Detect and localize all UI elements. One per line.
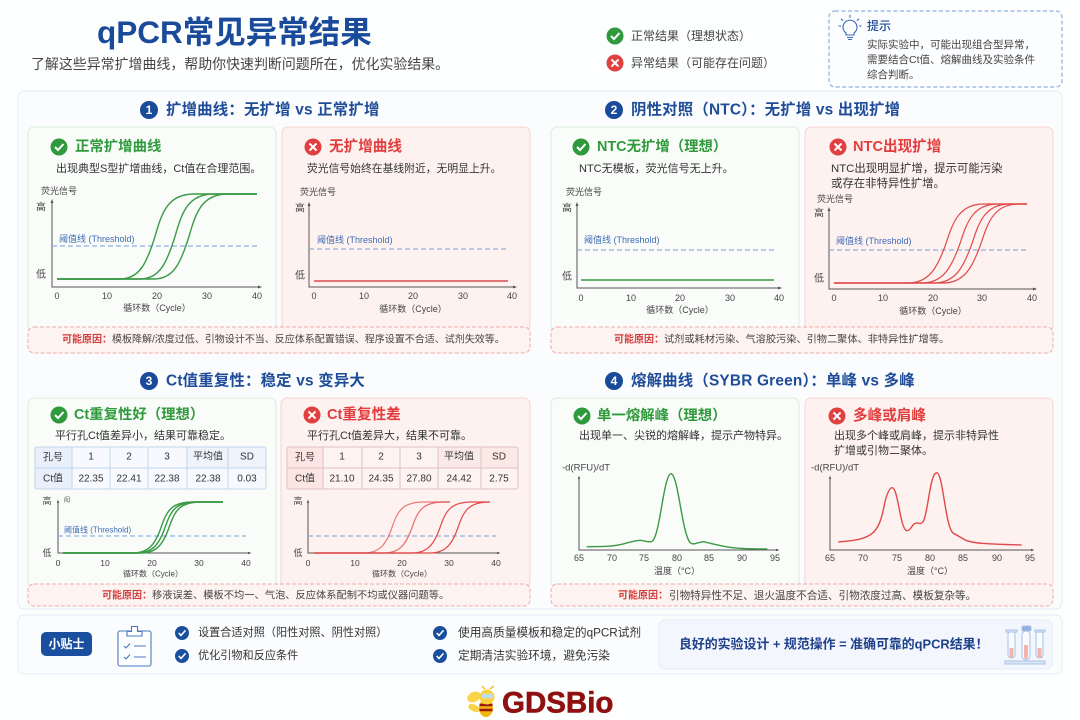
- data table: variable Ct values: SD: [492, 452, 506, 462]
- icon: light bulb: [838, 15, 862, 40]
- line chart: flat red line: 循环数（Cycle）: [379, 303, 447, 314]
- line chart: single melting peak: 80: [672, 553, 682, 563]
- data table: good Ct values: Ct值: [43, 472, 63, 484]
- line chart: spread red curves: 循环数（Cycle）: [372, 568, 432, 578]
- icon: check: [574, 408, 590, 424]
- line chart: normal S curves: 0: [54, 291, 60, 301]
- line chart: single melting peak: 85: [704, 553, 714, 563]
- callout: possible causes 4: [551, 584, 1053, 606]
- section 2 heading: 阴性对照（NTC）：无扩增 vs 出现扩增: [631, 100, 900, 118]
- tip text: 实际实验中，可能出现组合型异常，: [867, 38, 1035, 51]
- line chart: normal S curves: 高: [36, 200, 46, 214]
- line chart: red S curves: 阈值线 (Threshold): [836, 235, 912, 246]
- line chart: single melting peak: 65: [574, 553, 584, 563]
- callout: possible causes 2: 试剂或耗材污染、气溶胶污染、引物二聚体、非特异性扩增等。: [664, 332, 949, 346]
- icon: check: [50, 138, 68, 156]
- section 4 heading: 4: [611, 374, 618, 388]
- line chart: flat red line: [295, 186, 517, 314]
- icon: check: [50, 406, 68, 424]
- icon: cross: [304, 138, 322, 156]
- data table: good Ct values: 22.38: [195, 474, 221, 484]
- line chart: tight green curves: 高: [42, 495, 52, 506]
- card heading: 单一熔解峰（理想）: [597, 406, 727, 424]
- icon: cross: [304, 406, 320, 424]
- icon: cross: [830, 138, 846, 156]
- title: qPCR常见异常结果: [97, 14, 372, 50]
- callout: possible causes 3: 可能原因：: [102, 588, 152, 602]
- card heading: 多峰或肩峰: [853, 406, 926, 424]
- card heading: 无扩增曲线: [329, 137, 402, 155]
- tip text: 需要结合Ct值、熔解曲线及实验条件: [867, 53, 1035, 66]
- line chart: flat green line: 20: [675, 293, 685, 303]
- line chart: flat green line: 10: [626, 293, 636, 303]
- data table: good Ct values: SD: [240, 452, 254, 462]
- callout: possible causes 1: 模板降解/浓度过低、引物设计不当、反应体系配置错误、程序设置不合适、试剂失效等。: [112, 332, 505, 346]
- data table: variable Ct values: 24.42: [446, 474, 472, 484]
- line chart: red S curves: 40: [1027, 293, 1037, 303]
- line chart: tight green curves: 0: [56, 558, 61, 568]
- line chart: flat red line: 40: [507, 291, 517, 301]
- line chart: multiple melting peaks: 70: [858, 553, 868, 563]
- tip heading: 提示: [867, 18, 891, 33]
- line chart: single melting peak: 温度（°C）: [654, 565, 700, 576]
- subtitle: 了解这些异常扩增曲线，帮助你快速判断问题所在，优化实验结果。: [31, 56, 449, 72]
- line chart: multiple melting peaks: [811, 462, 1035, 576]
- card description: 出现单一、尖锐的熔解峰，提示产物特异。: [579, 428, 788, 442]
- data table: good Ct values: [35, 447, 266, 489]
- line chart: flat green line: 循环数（Cycle）: [646, 304, 714, 315]
- tip text: [867, 38, 1035, 81]
- icon: check: [572, 138, 590, 156]
- data table: good Ct values: 22.35: [78, 474, 104, 484]
- icon: test tubes: [1005, 626, 1045, 664]
- line chart: red S curves: 循环数（Cycle）: [899, 305, 967, 316]
- data table: variable Ct values: 27.80: [406, 474, 432, 484]
- panel: no amplification: [282, 127, 530, 332]
- line chart: red S curves: 0: [831, 293, 837, 303]
- data table: good Ct values: 2: [126, 452, 132, 462]
- line chart: tight green curves: 30: [194, 558, 204, 568]
- line chart: flat green line: [562, 186, 784, 315]
- tip: reagents: 使用高质量模板和稳定的qPCR试剂: [458, 626, 641, 640]
- panel: good repeatability: [28, 398, 276, 588]
- card description: 平行孔Ct值差异大，结果不可靠。: [307, 428, 472, 442]
- line chart: multiple melting peaks: 90: [992, 553, 1002, 563]
- card description: NTC无模板，荧光信号无上升。: [579, 161, 734, 175]
- icon: cross: [828, 408, 846, 424]
- card description: [831, 161, 1002, 190]
- callout: possible causes 2: 可能原因：: [614, 332, 664, 346]
- data table: good Ct values: 22.38: [154, 474, 180, 484]
- panel: single melt peak: [551, 398, 799, 588]
- line chart: red S curves: 30: [977, 293, 987, 303]
- line chart: single melting peak: 75: [639, 553, 649, 563]
- line chart: multiple melting peaks: 温度（°C）: [907, 565, 953, 576]
- line chart: normal S curves: 低: [36, 268, 46, 280]
- line chart: tight green curves: 循环数（Cycle）: [123, 568, 183, 578]
- line chart: spread red curves: 30: [444, 558, 454, 568]
- callout: possible causes 4: 可能原因：: [618, 588, 668, 602]
- data table: good Ct values: 平均值: [193, 450, 223, 462]
- line chart: red S curves: 低: [814, 272, 824, 284]
- card heading: 正常扩增曲线: [75, 137, 161, 155]
- callout: possible causes 1: [28, 327, 530, 353]
- callout: possible causes 2: [551, 327, 1053, 353]
- section 1 heading: 扩增曲线：无扩增 vs 正常扩增: [166, 100, 380, 118]
- data table: good Ct values: 3: [164, 452, 170, 462]
- tip: cleaning: 定期清洁实验环境，避免污染: [458, 648, 610, 662]
- line chart: tight green curves: 10: [100, 558, 110, 568]
- tip: controls: 设置合适对照（阳性对照、阴性对照）: [198, 625, 387, 639]
- line chart: flat green line: 30: [725, 293, 735, 303]
- line chart: normal S curves: 20: [152, 291, 162, 301]
- data table: variable Ct values: 24.35: [368, 474, 394, 484]
- line chart: normal S curves: 40: [252, 291, 262, 301]
- line chart: flat red line: 低: [295, 268, 305, 282]
- line chart: flat green line: 0: [578, 293, 584, 303]
- line chart: flat green line: 荧光信号: [566, 186, 602, 197]
- legend: normal result: [606, 28, 751, 44]
- line chart: single melting peak: 70: [607, 553, 617, 563]
- tips bar: [18, 615, 1062, 674]
- legend: normal result: 正常结果（理想状态）: [631, 28, 751, 43]
- line chart: red S curves: 20: [928, 293, 938, 303]
- line chart: normal S curves: 30: [202, 291, 212, 301]
- line chart: tight green curves: 闳: [64, 496, 70, 504]
- line chart: multiple melting peaks: 85: [958, 553, 968, 563]
- badge: tips: 小贴士: [48, 636, 85, 651]
- panel: NTC amplification: [805, 127, 1053, 332]
- card description: 出现多个峰或肩峰，提示非特异性: [834, 428, 999, 442]
- data table: good Ct values: 1: [88, 452, 94, 462]
- card heading: NTC出现扩增: [853, 137, 941, 155]
- line chart: flat red line: 0: [311, 291, 317, 301]
- data table: variable Ct values: 2.75: [489, 474, 509, 484]
- legend: abnormal result: 异常结果（可能存在问题）: [631, 56, 775, 70]
- line chart: spread red curves: [293, 495, 501, 578]
- data table: variable Ct values: [287, 447, 518, 489]
- line chart: tight green curves: 40: [241, 558, 251, 568]
- data table: variable Ct values: 2: [378, 452, 384, 462]
- line chart: spread red curves: 20: [397, 558, 407, 568]
- section 1: amplification curves: [28, 100, 530, 353]
- card description: 荧光信号始终在基线附近，无明显上升。: [307, 161, 501, 175]
- line chart: flat red line: 高: [295, 202, 305, 214]
- section 4: melting curves: [551, 370, 1053, 606]
- card description: 平行孔Ct值差异小，结果可靠稳定。: [55, 428, 231, 442]
- line chart: red S curves: 荧光信号: [817, 193, 853, 204]
- tip items: [175, 625, 641, 663]
- section 3 heading: 3: [146, 374, 153, 388]
- line chart: flat red line: 荧光信号: [300, 186, 336, 197]
- card heading: Ct重复性好（理想）: [74, 406, 204, 423]
- line chart: red S curves: [814, 193, 1037, 316]
- panel: multiple melt peaks: [805, 398, 1053, 588]
- line chart: spread red curves: 0: [306, 558, 311, 568]
- line chart: flat green line: 低: [562, 270, 572, 282]
- data table: good Ct values: 22.41: [116, 474, 142, 484]
- card description: NTC出现明显扩增，提示可能污染: [831, 161, 1002, 175]
- line chart: normal S curves: 荧光信号: [41, 185, 77, 196]
- line chart: flat red line: 20: [408, 291, 418, 301]
- tip: primers: [175, 648, 298, 663]
- icon: clipboard: [118, 626, 151, 666]
- line chart: flat red line: 阈值线 (Threshold): [317, 234, 393, 245]
- data table: variable Ct values: Ct值: [295, 472, 315, 484]
- line chart: tight green curves: 阈值线 (Threshold): [64, 524, 131, 534]
- card heading: Ct重复性差: [327, 405, 401, 423]
- card description: 或存在非特异性扩增。: [831, 176, 945, 190]
- line chart: single melting peak: [562, 462, 780, 576]
- icon: bee: [466, 686, 494, 717]
- section 2: negative control: [551, 100, 1053, 353]
- data table: variable Ct values: 21.10: [329, 474, 355, 484]
- panel: poor repeatability: [281, 398, 530, 588]
- line chart: single melting peak: 95: [770, 553, 780, 563]
- line chart: flat green line: 阈值线 (Threshold): [584, 234, 660, 245]
- line chart: normal S curves: 阈值线 (Threshold): [59, 233, 135, 244]
- callout: possible causes 1: 可能原因：: [62, 332, 112, 346]
- card description: [834, 428, 999, 457]
- line chart: spread red curves: 10: [350, 558, 360, 568]
- logo: GDSBio: [466, 686, 613, 720]
- logo wordmark: GDSBio: [502, 686, 613, 720]
- data table: good Ct values: 孔号: [43, 452, 63, 464]
- tip text: 综合判断。: [867, 68, 920, 81]
- section 1 heading: 1: [146, 103, 153, 117]
- card heading: NTC无扩增（理想）: [597, 137, 727, 155]
- line chart: multiple melting peaks: 95: [1025, 553, 1035, 563]
- line chart: flat green line: 40: [774, 293, 784, 303]
- panel: NTC no amplification: [551, 127, 799, 332]
- tip: primers: 优化引物和反应条件: [198, 648, 298, 662]
- legend: [606, 28, 775, 72]
- callout: possible causes 3: 移液误差、模板不均一、气泡、反应体系配制不均或仪器问题等。: [152, 588, 449, 602]
- summary box: [659, 620, 1052, 669]
- line chart: normal S curves: 10: [102, 291, 112, 301]
- line chart: normal S curves: 循环数（Cycle）: [123, 302, 191, 313]
- section 3: Ct repeatability: [28, 370, 530, 606]
- data table: variable Ct values: 1: [339, 452, 345, 462]
- line chart: multiple melting peaks: 75: [892, 553, 902, 563]
- line chart: multiple melting peaks: 80: [925, 553, 935, 563]
- line chart: tight green curves: [42, 495, 252, 578]
- summary box: 良好的实验设计 + 规范操作 = 准确可靠的qPCR结果！: [679, 636, 988, 652]
- data table: good Ct values: 0.03: [237, 474, 257, 484]
- line chart: multiple melting peaks: 65: [825, 553, 835, 563]
- line chart: flat red line: 30: [458, 291, 468, 301]
- callout: possible causes 3: [28, 584, 530, 606]
- card description: 扩增或引物二聚体。: [834, 443, 933, 457]
- tip box: [829, 11, 1062, 87]
- line chart: tight green curves: 20: [147, 558, 157, 568]
- callout: possible causes 4: 引物特异性不足、退火温度不合适、引物浓度过高、模板复杂等。: [669, 589, 976, 602]
- badge: tips: [41, 632, 92, 656]
- line chart: spread red curves: 低: [293, 547, 303, 558]
- line chart: single melting peak: 90: [737, 553, 747, 563]
- card description: 出现典型S型扩增曲线，Ct值在合理范围。: [56, 161, 261, 175]
- line chart: red S curves: 高: [814, 206, 824, 220]
- panel: normal amplification: [28, 127, 276, 332]
- section 4 heading: 熔解曲线（SYBR Green）：单峰 vs 多峰: [631, 370, 915, 390]
- section 3 heading: Ct值重复性：稳定 vs 变异大: [166, 370, 365, 390]
- line chart: spread red curves: 高: [293, 495, 303, 506]
- section 2 heading: 2: [611, 103, 618, 117]
- data table: variable Ct values: 3: [416, 452, 422, 462]
- line chart: flat green line: 高: [562, 202, 572, 214]
- line chart: flat red line: 10: [359, 291, 369, 301]
- line chart: spread red curves: 40: [491, 558, 501, 568]
- data table: variable Ct values: 孔号: [295, 452, 315, 464]
- line chart: tight green curves: 低: [42, 547, 52, 558]
- line chart: red S curves: 10: [878, 293, 888, 303]
- line chart: multiple melting peaks: -d(RFU)/dT: [811, 462, 859, 474]
- main panel background: [18, 91, 1062, 609]
- line chart: single melting peak: -d(RFU)/dT: [562, 462, 610, 474]
- line chart: normal S curves: [36, 185, 262, 313]
- data table: variable Ct values: 平均值: [444, 450, 474, 462]
